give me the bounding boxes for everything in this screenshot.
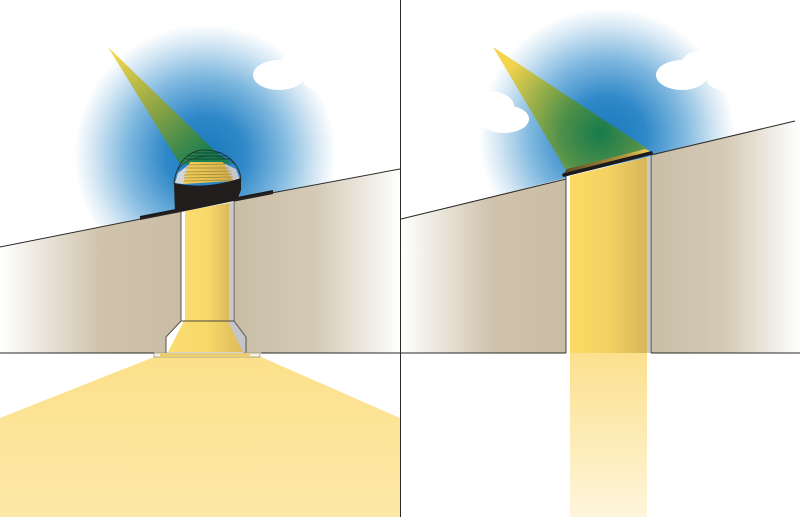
- dome with reflector rings: [174, 150, 241, 184]
- tube: [181, 201, 234, 321]
- panel: tubular skylight: [0, 20, 400, 517]
- icon: cloud: [656, 50, 750, 91]
- diffuser flange: [154, 353, 260, 357]
- roof flashing: [140, 190, 273, 220]
- wall: right section: [233, 169, 400, 353]
- skylight frame: [564, 153, 651, 175]
- wall: right section: [651, 120, 800, 353]
- blue sky glow: [70, 20, 340, 234]
- light beam through skylight: [493, 47, 648, 170]
- icon: cloud: [253, 53, 342, 91]
- wall: left section: [0, 211, 181, 353]
- icon: cloud: [462, 91, 529, 133]
- light spread into room: [0, 357, 400, 517]
- panel: conventional skylight: [401, 0, 800, 517]
- light shaft in room: [570, 353, 647, 517]
- light beam entering dome: [108, 47, 232, 164]
- blue sky glow: [475, 0, 740, 201]
- diffuser housing: [166, 321, 246, 353]
- black dome collar: [174, 178, 241, 213]
- wall: left section: [401, 179, 566, 353]
- skylight glazing: [564, 149, 651, 173]
- shaft: [566, 156, 651, 353]
